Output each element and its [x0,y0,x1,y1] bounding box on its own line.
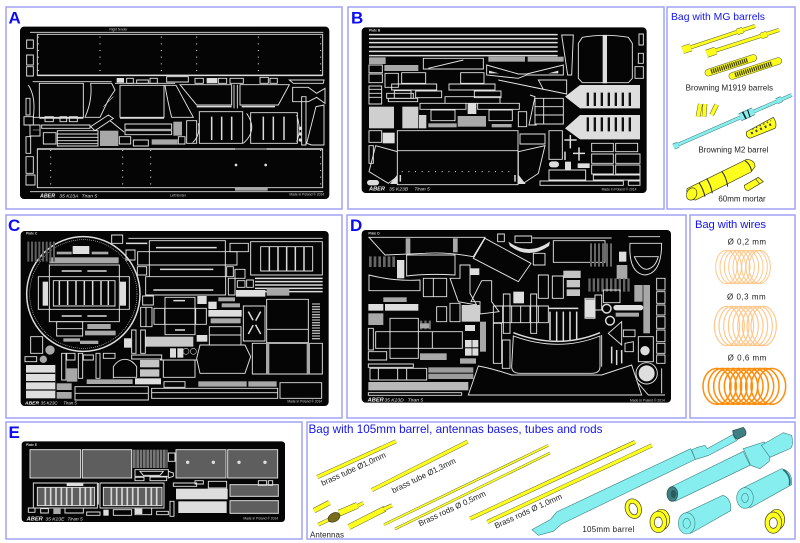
label: brass rods 1,0 mm: Brass rods Ø 1,0mm [493,492,564,530]
etched fret: plate A: Left fender [170,194,187,198]
panel: plate C [6,215,342,418]
label: 60mm mortar: 60mm mortar [718,195,766,204]
heading: D: D [350,216,362,235]
etched fret: plate D: 35 K23D [384,397,404,403]
etched fret: plate E: ABER [26,517,44,523]
sleeve cylinder 2 [737,469,792,508]
etched fret: plate A: ABER [39,193,55,199]
etched fret: plate C: Plate C [26,232,38,236]
label: Browning M1919 barrels: Browning M1919 barrels [686,84,773,93]
etched fret: plate B: Tiran 5 [414,187,430,193]
etched fret: plate B [362,27,647,193]
brass rods 0,5 mm [384,445,550,529]
muzzle brake [746,117,776,138]
etched fret: plate D [362,230,671,403]
etched fret: plate E: Plate E [26,443,38,447]
coil: 0,3 mm wire [714,306,776,346]
heading: A: A [8,8,21,28]
etched fret: plate C: Made in Poland © 2014 [287,400,322,404]
MG barrel 1 [683,26,755,50]
etched fret: plate A: Right fender [109,28,128,32]
MG barrel 2 [707,30,779,54]
105mm barrel [532,427,746,535]
label: Browning M2 barrel: Browning M2 barrel [698,145,769,154]
etched fret: plate E [22,441,285,523]
sleeve cylinder 1 [678,495,731,534]
perforated jacket 1 [708,58,753,73]
label: brass tube 1,0 mm: brass tube Ø1,0mm [320,450,388,488]
etched fret: plate C [21,231,329,406]
heading: bag with 105mm barrel: Bag with 105mm barrel, antennas bases, tubes and rods [308,423,603,436]
etched fret: plate C: ABER [24,400,40,406]
etched fret: plate A: Made in Poland © 2014 [289,193,324,197]
etched fret: plate C: 35 K23C [41,400,58,405]
panel: plate E [6,422,302,539]
etched fret: plate B: Plate B [369,29,381,33]
coil: 0,2 mm wire [716,250,770,284]
etched fret: plate D: Made in Poland © 2014 [630,398,665,402]
heading: C: C [8,216,20,235]
panel: plate D [347,215,686,418]
etched fret: plate D: Plate D [368,232,380,236]
panel: plate A [6,7,342,209]
panel: plate B [348,7,664,209]
coil: 0,6 mm wire [703,368,786,404]
label: brass tube 1,3 mm: brass tube Ø1,3mm [390,456,458,495]
etched fret: plate A [20,27,329,199]
etched fret: plate B: ABER [368,187,386,193]
panel: bag with MG barrels [667,7,795,209]
etched fret: plate A: Tiran 5 [82,193,97,199]
etched fret: plate B: Made in Poland © 2014 [602,187,637,191]
label: 0,6 mm wire: Ø 0,6 mm [728,353,767,362]
label: 105mm barrel: 105mm barrel [582,525,635,534]
brass rods 1,0 mm [470,442,652,522]
thermal sleeve [667,433,793,501]
etched fret: plate E: Tiran 5 [67,516,83,522]
label: 0,2 mm wire: Ø 0,2 mm [728,237,766,246]
antenna base rings [622,497,785,533]
brass tube 1,3 mm [372,442,468,490]
etched fret: plate D: Tiran 5 [408,397,423,403]
M2 barrel [674,95,792,147]
brass tube 1,0 mm [317,441,396,477]
etched fret: plate C: Tiran 5 [63,400,77,405]
label: brass rods 0,5 mm: Brass rods Ø 0,5mm [417,489,488,528]
cartridges [698,104,717,117]
mortar part [744,177,763,191]
mortar tube [684,159,755,202]
heading: bag with MG barrels: Bag with MG barrels [671,12,765,23]
etched fret: plate D: ABER [367,397,385,403]
etched fret: plate A: 35 K23A [59,193,79,199]
heading: bag with wires: Bag with wires [695,219,766,231]
heading: B: B [351,8,363,28]
label: 0,3 mm wire: Ø 0,3 mm [727,292,766,301]
perforated jacket 2 [732,61,778,76]
antenna parts [314,503,392,527]
panel: bag with barrel, bases, tubes and rods [307,422,795,539]
etched fret: plate E: Made in Poland © 2014 [243,516,278,520]
panel: bag with wires [690,215,795,418]
etched fret: plate B: 35 K23B [389,187,409,193]
etched fret: plate E: 35 K23E [45,516,65,522]
heading: E: E [8,423,20,442]
label: antennas: Antennas [310,530,344,539]
